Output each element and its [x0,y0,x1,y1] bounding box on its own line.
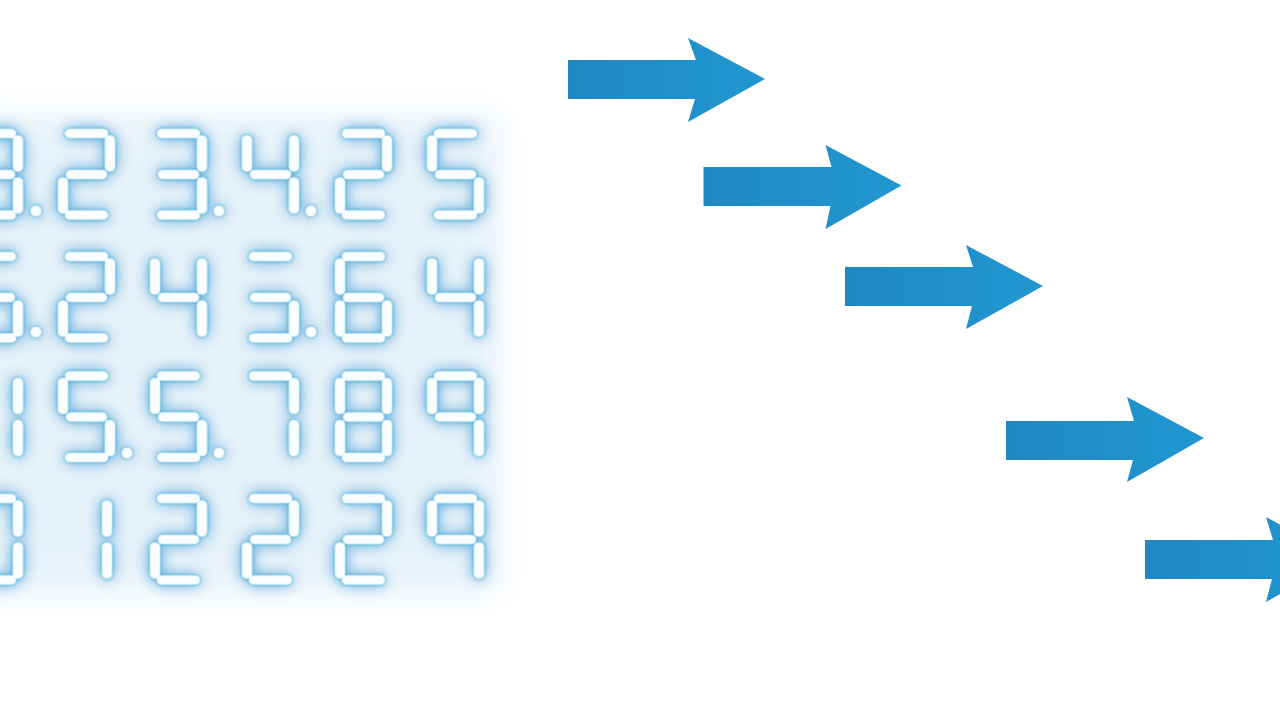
arrow 4 [1006,397,1204,482]
arrow 1 [568,38,765,122]
row 1: 8.2 3.4.2 5 [0,129,484,220]
row 4: 0 1 2 2 2 9 [0,494,484,584]
digit display panel [0,129,484,584]
arrow 5 [1145,517,1280,602]
row 3: 1 5.5.7 8 9 [0,372,484,462]
arrow 3 [845,245,1043,329]
arrow 2 [704,145,902,229]
row 2: 6.2 4 5.6 4 [0,252,484,342]
panel: soft blue glow behind digits [0,116,500,592]
